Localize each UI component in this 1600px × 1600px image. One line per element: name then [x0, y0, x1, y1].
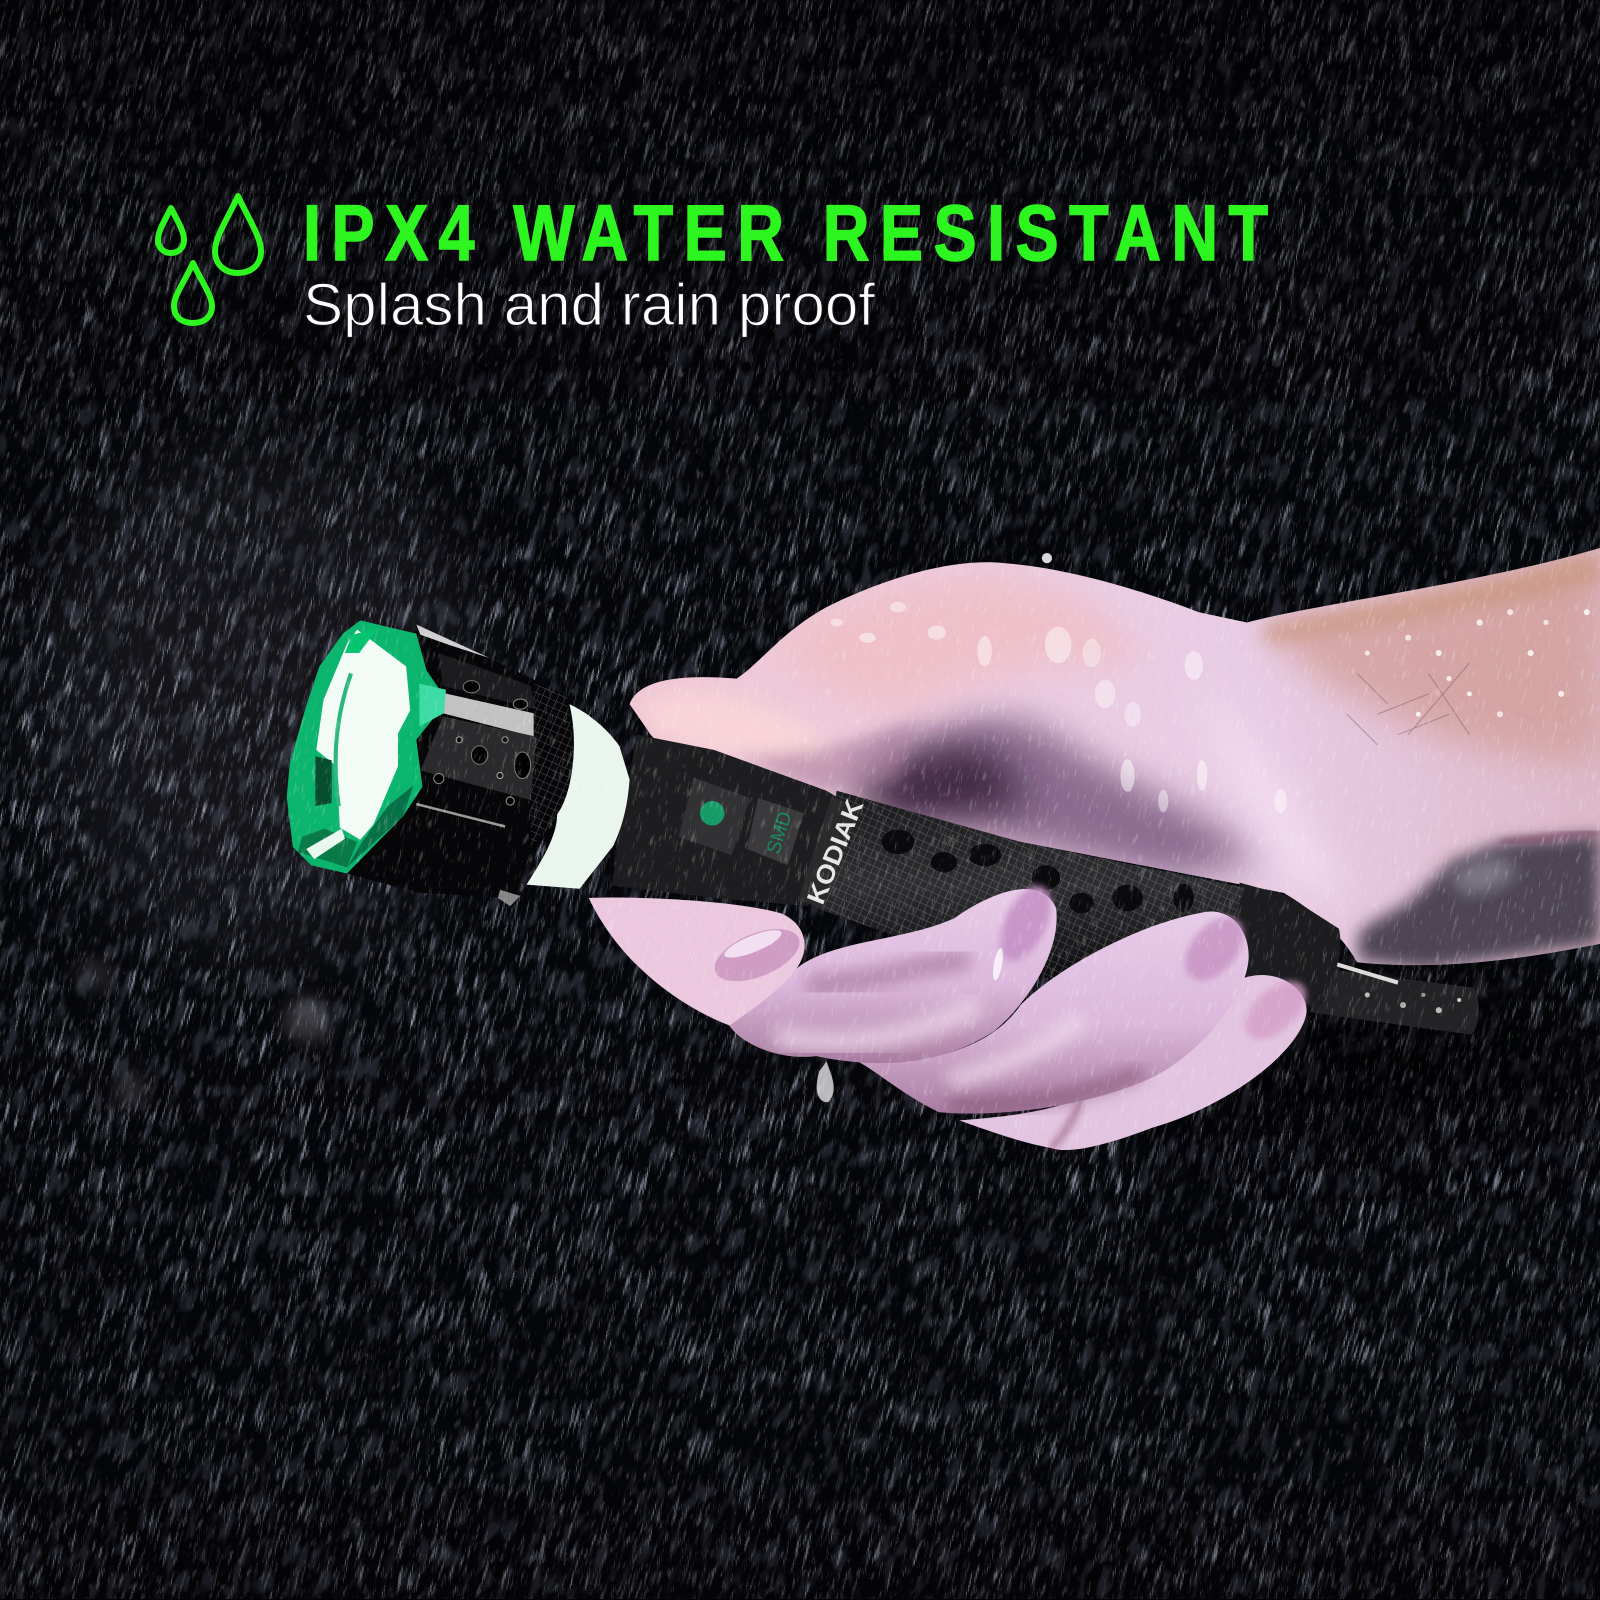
knurled grip [816, 791, 1245, 980]
hand and flashlight photo [287, 548, 1600, 1150]
white glowing ring [527, 704, 630, 889]
pinky finger [959, 970, 1316, 1150]
small drop [158, 208, 184, 253]
logo band: KODIAK [802, 795, 870, 908]
water droplets on skin [831, 553, 1590, 813]
icon: water drops [158, 196, 261, 323]
large drop [215, 196, 261, 273]
lanyard strap [1310, 964, 1479, 1035]
mode button: SMD [762, 809, 797, 857]
green bezel [287, 620, 446, 873]
hand: fingers [589, 878, 1316, 1150]
index finger [589, 897, 807, 1026]
middle finger [727, 878, 1061, 1063]
head body [347, 624, 574, 906]
power button with logo [679, 778, 750, 855]
ring finger [857, 906, 1255, 1114]
title: IPX4 WATER RESISTANT [303, 190, 1268, 277]
tail cap [1214, 883, 1340, 1010]
hand: back of hand and forearm [630, 548, 1600, 969]
hanging water drop [817, 1061, 834, 1102]
lower drop [174, 263, 212, 323]
subtitle: Splash and rain proof [303, 272, 876, 338]
switch section [612, 735, 852, 906]
flashlight [287, 620, 1479, 1035]
hair on forearm [1347, 663, 1469, 745]
mode button [747, 798, 804, 865]
